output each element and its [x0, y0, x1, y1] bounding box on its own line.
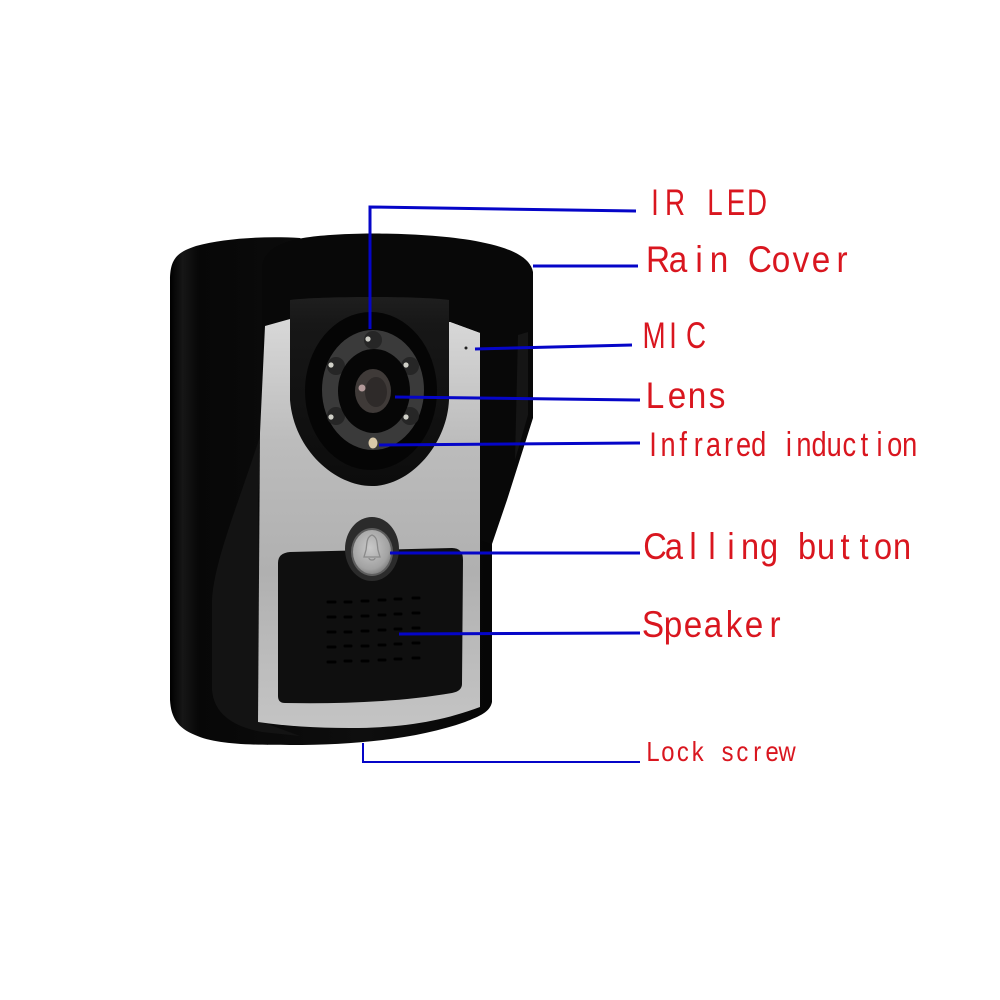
line: lock screw [363, 743, 640, 762]
steel faceplate [258, 319, 480, 728]
label: Calling button: Calling button [643, 526, 911, 567]
back housing [170, 237, 492, 745]
speaker slots [328, 598, 419, 662]
line: IR LED [370, 207, 636, 329]
label: IR LED: IR LED [651, 181, 767, 223]
label: Lens: Lens [646, 375, 725, 416]
label: Infrared induction: Infrared induction [649, 425, 917, 464]
IR LEDs [328, 336, 409, 420]
cover inner side shading [515, 332, 528, 460]
line: lens [395, 397, 640, 400]
outer black ring [305, 312, 437, 470]
line: MIC [475, 345, 632, 349]
mic hole [464, 346, 468, 350]
line: speaker [399, 633, 640, 634]
LED ring [322, 330, 424, 450]
label: Lock screw: Lock screw [646, 735, 796, 767]
calling button [345, 517, 399, 581]
icon: bell [364, 535, 380, 560]
line: infrared induction [379, 443, 640, 445]
line: rain cover [533, 264, 638, 268]
callout labels [642, 181, 917, 767]
camera hood [283, 255, 449, 486]
line: calling button [390, 552, 640, 554]
label: Rain Cover: Rain Cover [646, 239, 848, 280]
camera module [305, 312, 437, 470]
doorbell device [170, 234, 533, 745]
callout lines [363, 207, 640, 762]
label: Speaker: Speaker [642, 604, 781, 645]
speaker panel [278, 548, 463, 703]
lens [355, 369, 391, 413]
LED wells [327, 331, 419, 425]
rain cover [262, 234, 533, 544]
label: MIC: MIC [642, 314, 706, 356]
inner ring [338, 349, 410, 433]
side ridge [212, 430, 300, 736]
infrared sensor [368, 438, 378, 448]
